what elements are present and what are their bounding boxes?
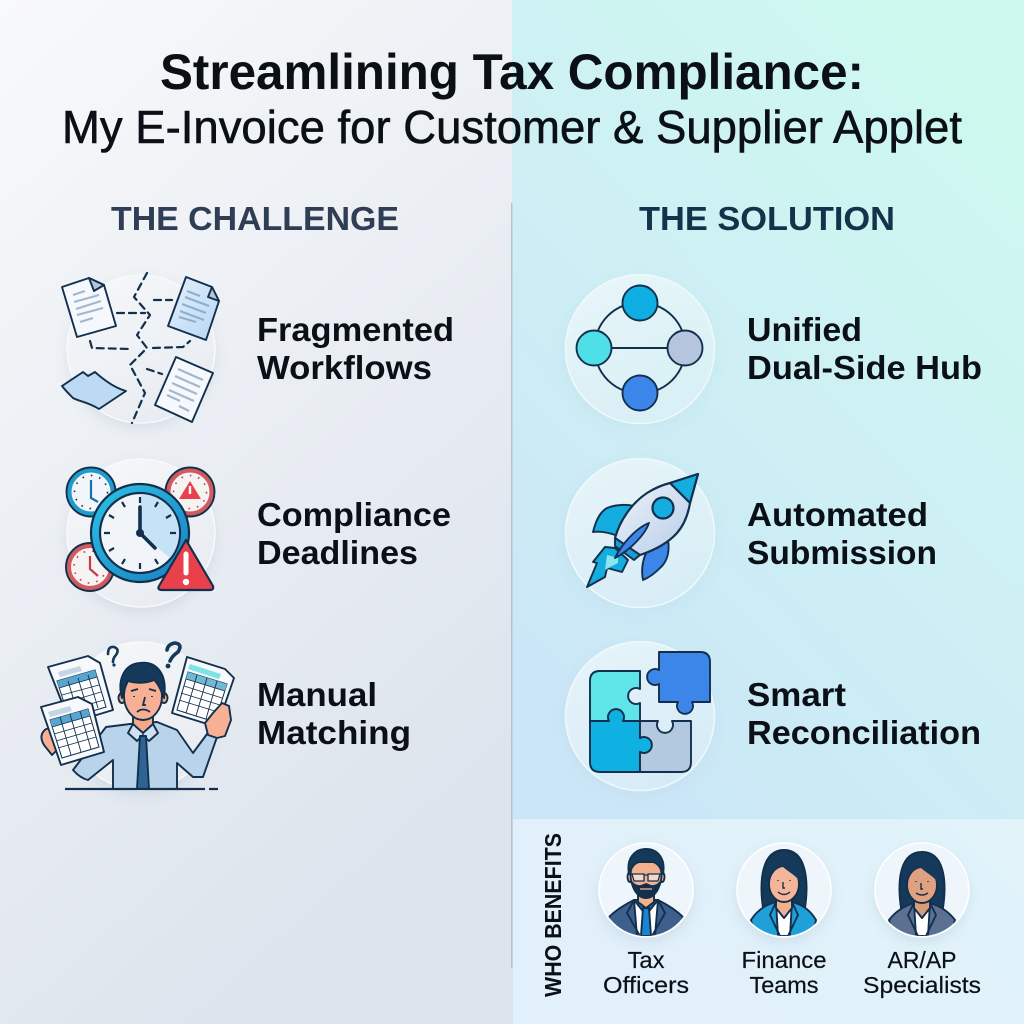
icon: scattered documents — [62, 273, 219, 423]
avatar: woman in blue jacket — [737, 843, 831, 940]
label: smart reconciliation: Smart — [747, 676, 846, 713]
label: unified dual-side hub: Unified — [747, 311, 862, 348]
icon: clocks and warning — [66, 459, 215, 607]
label: finance teams: Finance — [742, 947, 826, 973]
sheet: right — [172, 657, 234, 727]
heading: the solution: THE SOLUTION — [639, 200, 895, 237]
divider — [511, 203, 512, 968]
background: solution side — [512, 0, 1024, 1024]
persona: ar/ap specialists — [863, 843, 981, 998]
label: compliance deadlines: Compliance — [257, 496, 451, 533]
label: fragmented workflows: Fragmented — [257, 311, 454, 348]
item: manual matching — [41, 642, 411, 790]
label: manual matching: Matching — [257, 714, 411, 751]
label: fragmented workflows: Workflows — [257, 349, 432, 386]
label: compliance deadlines: Deadlines — [257, 534, 418, 571]
label: automated submission: Submission — [747, 534, 937, 571]
icon: puzzle pieces — [566, 642, 714, 790]
panel: the challenge — [41, 200, 454, 790]
item: unified dual-side hub — [566, 274, 982, 424]
sheet: back left — [48, 656, 113, 723]
label: unified dual-side hub: Dual-Side Hub — [747, 349, 982, 386]
title: My E-Invoice for Customer & Supplier Applet — [62, 101, 962, 153]
label: tax officers: Tax — [628, 947, 665, 973]
background: challenge side — [0, 0, 512, 1024]
label: automated submission: Automated — [747, 496, 928, 533]
icon: rocket — [566, 458, 714, 608]
sheet: front left — [41, 697, 104, 765]
item: compliance deadlines — [66, 459, 451, 607]
title: Streamlining Tax Compliance: — [160, 44, 864, 100]
persona: tax officers — [599, 843, 693, 998]
icon: hub network — [566, 274, 714, 424]
label: ar/ap specialists: Specialists — [863, 972, 981, 998]
item: automated submission — [566, 458, 937, 608]
label: smart reconciliation: Reconciliation — [747, 714, 981, 751]
label: finance teams: Teams — [750, 972, 818, 998]
avatar: woman in grey jacket — [875, 843, 969, 940]
panel: the solution — [566, 200, 982, 790]
heading: who benefits: WHO BENEFITS — [540, 833, 566, 997]
item: smart reconciliation — [566, 642, 981, 790]
item: fragmented workflows — [62, 273, 454, 423]
panel: who benefits — [513, 819, 1024, 1024]
label: manual matching: Manual — [257, 676, 377, 713]
label: ar/ap specialists: AR/AP — [888, 947, 956, 973]
heading: the challenge: THE CHALLENGE — [111, 200, 399, 237]
label: tax officers: Officers — [603, 972, 689, 998]
icon: confused man with spreadsheets — [41, 642, 234, 790]
title — [62, 44, 962, 153]
persona: finance teams — [737, 843, 831, 998]
avatar: bearded man with glasses — [599, 843, 693, 940]
